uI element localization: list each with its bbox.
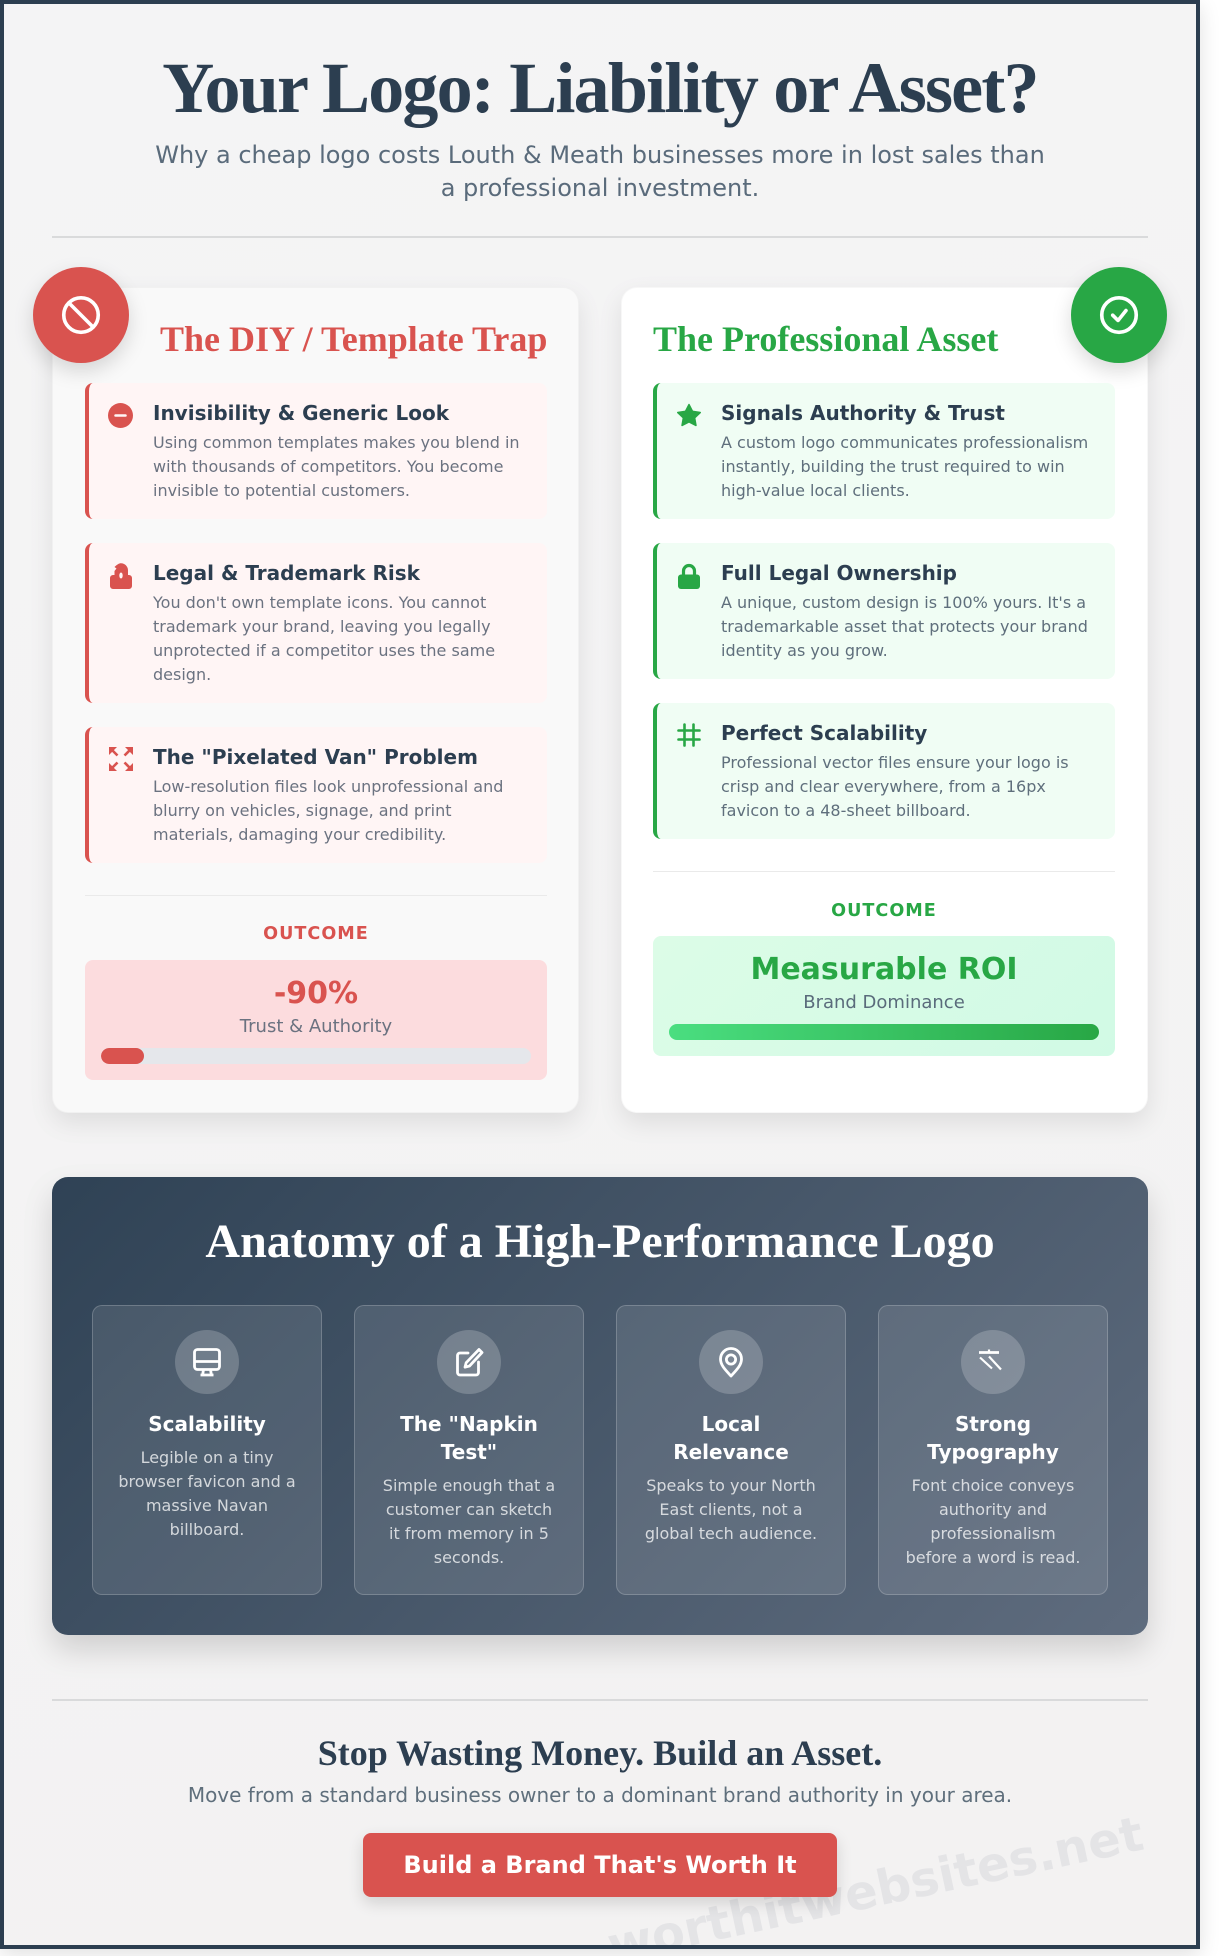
item text: Low-resolution files look unprofessional and (153, 776, 503, 796)
card text (906, 1476, 1080, 1567)
item text: Professional vector files ensure your logo is (721, 752, 1069, 772)
item: legal risk (85, 543, 547, 703)
card text (118, 1448, 296, 1539)
icon: pencil square (437, 1330, 501, 1394)
item text (721, 432, 1088, 500)
card text: seconds. (434, 1548, 504, 1567)
icon: type strike (961, 1330, 1025, 1394)
bar fill: 10 percent (101, 1048, 144, 1064)
stat: measurable ROI: Measurable ROI (750, 952, 1018, 987)
item text: crisp and clear everywhere, from a 16px (721, 777, 1046, 796)
card title: Relevance (673, 1440, 789, 1464)
outcome label: professional: OUTCOME (831, 900, 937, 920)
item title: Signals Authority & Trust (721, 401, 1005, 425)
card title: The "Napkin (400, 1412, 538, 1436)
panel: professional asset (621, 287, 1148, 1113)
item text (153, 432, 520, 500)
item title: The "Pixelated Van" Problem (153, 745, 478, 769)
panel: DIY template trap (52, 287, 579, 1113)
card title (927, 1412, 1059, 1464)
card title: Typography (927, 1440, 1059, 1464)
card text: East clients, not a (659, 1500, 803, 1519)
anatomy card: napkin test (354, 1305, 584, 1595)
card text: Legible on a tiny (141, 1448, 273, 1467)
item text: A custom logo communicates professionalism (721, 432, 1088, 452)
anatomy card: scalability (92, 1305, 322, 1595)
outcome box: professional (653, 936, 1115, 1056)
heading: professional asset: The Professional Asset (653, 319, 998, 359)
item text: high-value local clients. (721, 481, 910, 500)
icon: star (677, 404, 701, 426)
item: pixelated van (85, 727, 547, 863)
card title: Strong (955, 1412, 1031, 1436)
icon: minus circle (108, 403, 133, 428)
card text: authority and (939, 1500, 1047, 1519)
item: legal ownership (653, 543, 1115, 679)
progress bar (101, 1048, 531, 1064)
icon: lock (678, 564, 700, 589)
item text: A unique, custom design is 100% yours. It's a (721, 592, 1086, 612)
item text (153, 592, 495, 684)
item text: trademark your brand, leaving you legally (153, 617, 491, 636)
item text: materials, damaging your credibility. (153, 825, 446, 844)
card text: Speaks to your North (646, 1476, 816, 1495)
subtitle: Why a cheap logo costs Louth & Meath businesses more in lost sales than (155, 141, 1045, 169)
item text: Using common templates makes you blend in (153, 432, 520, 452)
card text: Simple enough that a (383, 1476, 555, 1495)
item title: Full Legal Ownership (721, 561, 957, 585)
card title (400, 1412, 538, 1464)
icon: check badge (1071, 267, 1167, 363)
icon: broken lock (110, 563, 132, 589)
footer heading: Stop Wasting Money. Build an Asset. (318, 1733, 882, 1773)
item text: invisible to potential customers. (153, 481, 410, 500)
stat label: Trust & Authority (240, 1016, 392, 1037)
item text: identity as you grow. (721, 641, 888, 660)
subtitle (155, 141, 1045, 202)
icon: hash (677, 723, 701, 747)
item: invisibility (85, 383, 547, 519)
outcome box: DIY (85, 960, 547, 1080)
anatomy card: typography (878, 1305, 1108, 1595)
item title: Legal & Trademark Risk (153, 561, 420, 585)
card text: professionalism (930, 1524, 1056, 1543)
heading: DIY trap: The DIY / Template Trap (160, 319, 547, 359)
card text: global tech audience. (645, 1524, 817, 1543)
stat label: Brand Dominance (803, 992, 965, 1012)
item: scalability (653, 703, 1115, 839)
item text (721, 592, 1088, 660)
item text: trademarkable asset that protects your brand (721, 617, 1088, 636)
card text: it from memory in 5 (389, 1524, 549, 1543)
card text: billboard. (170, 1520, 244, 1539)
card text: browser favicon and a (118, 1472, 296, 1491)
item text: favicon to a 48-sheet billboard. (721, 801, 971, 820)
item text: You don't own template icons. You cannot (153, 592, 486, 612)
item text: design. (153, 665, 211, 684)
item text (721, 752, 1069, 820)
panel: anatomy of a logo (52, 1177, 1148, 1635)
item text: instantly, building the trust required to win (721, 457, 1065, 476)
card title: Scalability (148, 1412, 266, 1436)
card text: Font choice conveys (912, 1476, 1074, 1495)
card text: customer can sketch (386, 1500, 552, 1519)
card title: Test" (441, 1440, 497, 1464)
call to action button: Build a Brand That's Worth It (403, 1851, 797, 1879)
anatomy card: local relevance (616, 1305, 846, 1595)
item text (153, 776, 503, 844)
card text: before a word is read. (906, 1548, 1080, 1567)
card title: Local (702, 1412, 760, 1436)
icon: map pin (699, 1330, 763, 1394)
heading: anatomy: Anatomy of a High-Performance Logo (205, 1215, 995, 1268)
item: authority (653, 383, 1115, 519)
item title: Perfect Scalability (721, 721, 927, 745)
main title: Your Logo: Liability or Asset? (162, 48, 1038, 128)
subtitle: a professional investment. (441, 174, 759, 202)
outcome label: DIY: OUTCOME (263, 924, 369, 944)
stat: minus 90 percent: -90% (274, 976, 358, 1011)
call to action button (363, 1833, 837, 1897)
item text: with thousands of competitors. You become (153, 457, 503, 476)
item text: blurry on vehicles, signage, and print (153, 801, 452, 820)
icon: monitor (175, 1330, 239, 1394)
footer text: Move from a standard business owner to a dominant brand authority in your area. (188, 1783, 1012, 1807)
item title: Invisibility & Generic Look (153, 401, 449, 425)
card text (645, 1476, 817, 1543)
icon: expand arrows (109, 747, 133, 771)
item text: unprotected if a competitor uses the same (153, 641, 495, 660)
card text: massive Navan (146, 1496, 268, 1515)
progress bar: full (669, 1024, 1099, 1040)
card title (673, 1412, 789, 1464)
card text (383, 1476, 555, 1567)
icon: ban badge (33, 267, 129, 363)
